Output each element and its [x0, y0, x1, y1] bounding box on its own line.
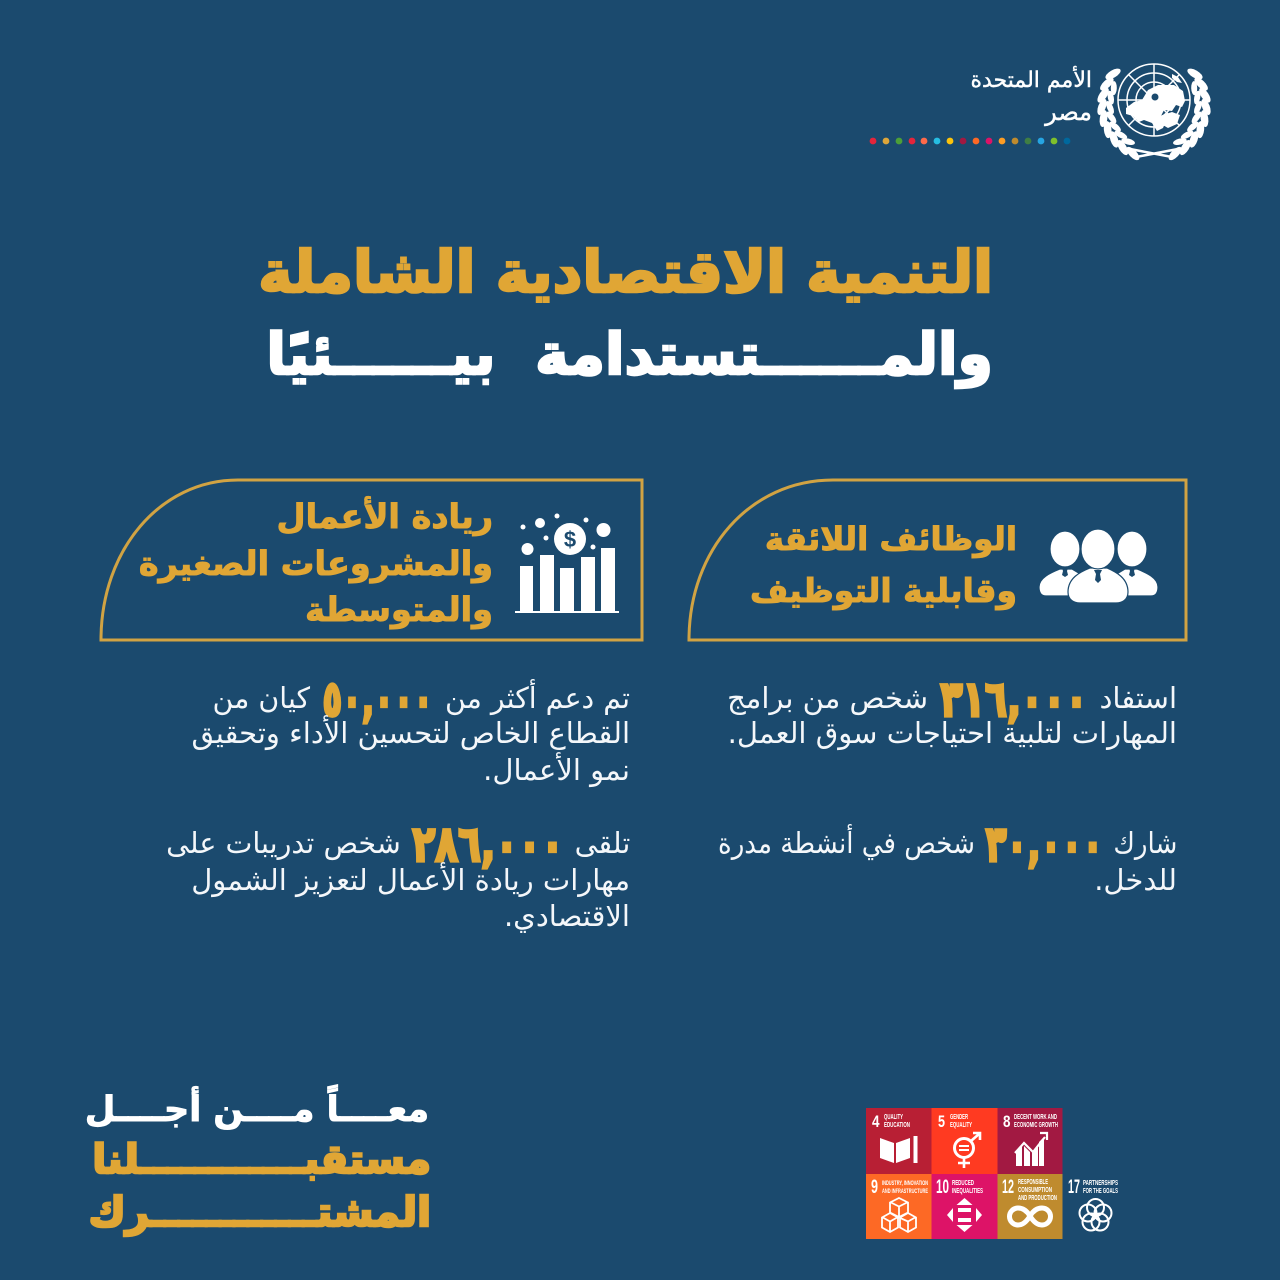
SDG 17 partnerships: FOR THE GOALS [1083, 1188, 1118, 1195]
panel heading: decent jobs and employability [750, 520, 1017, 610]
text block: 30,000 income activities: ٣٠,٠٠٠ [985, 816, 1103, 873]
text block: 50,000 private sector entities: القطاع الخاص لتحسين الأداء وتحقيق [192, 716, 630, 750]
text block: 286,000 entrepreneurship training: الاقتصادي. [504, 899, 630, 933]
panel heading: decent jobs and employability: وقابلية التوظيف [750, 571, 1017, 610]
text block: 30,000 income activities: للدخل. [1094, 863, 1177, 897]
text block: 50,000 private sector entities: نمو الأعمال. [483, 753, 630, 787]
tile: SDG 5 gender equality: EQUALITY [950, 1122, 972, 1129]
panel heading: decent jobs and employability: الوظائف اللائقة [765, 520, 1017, 558]
tile: SDG 5 gender equality [932, 1108, 998, 1174]
text block: 316,000 skills programmes: ٣١٦,٠٠٠ [941, 671, 1088, 728]
tile: SDG 4 quality education [866, 1108, 932, 1174]
tile: SDG 10 reduced inequalities: REDUCED [952, 1180, 974, 1187]
icon: bar chart with dollar coin: $ [564, 527, 576, 552]
icon: bar chart with dollar coin [515, 514, 619, 613]
icon: three people [1040, 530, 1158, 602]
slogan: together for our shared future [85, 1084, 431, 1238]
panel heading: entrepreneurship and SMEs [139, 496, 493, 630]
tile: SDG 8 decent work: 8 [1003, 1112, 1010, 1131]
logo text: UN Egypt: مصر [1045, 98, 1092, 126]
title [258, 238, 993, 390]
tile: SDG 10 reduced inequalities: INEQUALITIES [952, 1188, 983, 1195]
tile: SDG 9 industry: 9 [871, 1177, 878, 1198]
panel: entrepreneurship header [100, 478, 644, 642]
text block: 286,000 entrepreneurship training: ٢٨٦,٠٠٠ [412, 816, 563, 873]
title: التنمية الاقتصادية الشاملة [258, 238, 993, 306]
tile: SDG 5 gender equality: GENDER [950, 1114, 968, 1121]
tile: SDG 9 industry [866, 1174, 932, 1239]
panel heading: entrepreneurship and SMEs: والمتوسطة [305, 590, 493, 629]
tile: SDG 10 reduced inequalities [932, 1174, 998, 1239]
text block: 30,000 income activities [718, 816, 1177, 897]
tile: SDG 8 decent work: ECONOMIC GROWTH [1014, 1122, 1058, 1129]
text block: 286,000 entrepreneurship training [166, 816, 630, 933]
tile: SDG 12 responsible consumption [998, 1174, 1062, 1239]
tile: SDG 4 quality education: QUALITY [884, 1114, 903, 1121]
slogan: together for our shared future: معــــاً مــــن أجــــل [85, 1090, 429, 1130]
logo text: UN Egypt [970, 66, 1092, 126]
SDG 17 partnerships: 17 [1068, 1177, 1080, 1198]
panel: decent jobs header [688, 478, 1188, 642]
tile: SDG 5 gender equality: 5 [938, 1112, 945, 1131]
panel heading: entrepreneurship and SMEs: ريادة الأعمال [276, 497, 493, 536]
tile: SDG 9 industry: INDUSTRY, INNOVATION [882, 1180, 928, 1187]
tile: SDG 4 quality education: EDUCATION [884, 1122, 910, 1129]
text block: 50,000 private sector entities: تم دعم أكثر من كيان من [212, 681, 630, 715]
tile: SDG 12 responsible consumption: RESPONSIBLE [1018, 1179, 1048, 1186]
text block: 50,000 private sector entities [192, 671, 630, 788]
tile: SDG 10 reduced inequalities: 10 [936, 1177, 949, 1198]
text block: 50,000 private sector entities: ٥٠,٠٠٠ [322, 671, 433, 728]
tile: SDG 12 responsible consumption: 12 [1002, 1177, 1014, 1198]
text block: 316,000 skills programmes: استفاد شخص من برامج [727, 681, 1177, 715]
tile: SDG 8 decent work [998, 1108, 1062, 1174]
text block: 316,000 skills programmes [727, 671, 1177, 750]
SDG 17 partnerships [1068, 1177, 1118, 1230]
title: والمــــــتستدامة بيــــــئيًا [266, 321, 993, 388]
text block: 286,000 entrepreneurship training: مهارات ريادة الأعمال لتعزيز الشمول [191, 863, 630, 897]
SDG 17 partnerships: PARTNERSHIPS [1083, 1180, 1118, 1187]
slogan: together for our shared future: مستقبــــــــــــلنا [92, 1137, 431, 1183]
tile: SDG 9 industry: AND INFRASTRUCTURE [882, 1188, 928, 1195]
tile: SDG 8 decent work: DECENT WORK AND [1014, 1114, 1057, 1121]
panel heading: entrepreneurship and SMEs: والمشروعات الصغيرة [139, 544, 493, 583]
slogan: together for our shared future: المشتــــــــــــرك [89, 1188, 431, 1236]
tile: SDG 12 responsible consumption: CONSUMPTION [1018, 1187, 1052, 1194]
logo text: UN Egypt: الأمم المتحدة [970, 68, 1092, 93]
tile: SDG 4 quality education: 4 [872, 1112, 880, 1131]
text block: 30,000 income activities: شارك شخص في أنشطة مدرة [718, 826, 1177, 860]
text block: 316,000 skills programmes: المهارات لتلبية احتياجات سوق العمل. [728, 716, 1177, 750]
text block: 286,000 entrepreneurship training: تلقى شخص تدريبات على [166, 826, 630, 860]
tile: SDG 12 responsible consumption: AND PRODUCTION [1018, 1195, 1057, 1202]
